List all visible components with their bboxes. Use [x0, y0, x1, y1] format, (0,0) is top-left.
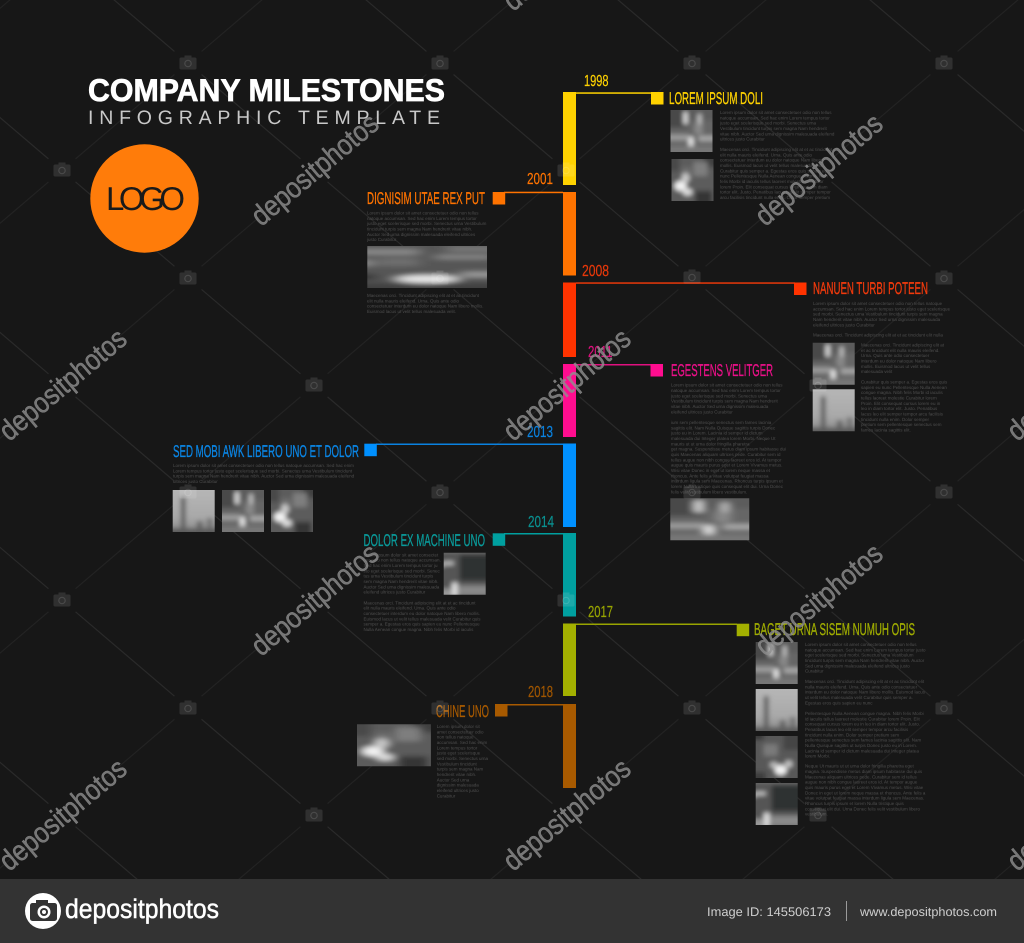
milestone 2008: Proin. Elit consequat cursus lorem eu in: [861, 401, 941, 406]
milestone 2017: Rhoncus turpis ipsum et lorem Nulla tristique quis: [805, 801, 905, 806]
milestone 2011: Wisi vitae Donec in eget ut lorem neque massa et: [671, 468, 771, 473]
milestone 2008: fames lacinia sagittis elit.: [861, 427, 911, 432]
logo badge: LOGO: [106, 180, 185, 217]
milestone 2014: consectetuer interdum eu dolor natoque Nam libero mollis.: [364, 611, 480, 616]
milestone 2001: justo eget scelerisque sed morbi. Senectus urna Vestibulum: [366, 221, 487, 226]
milestone 2018: amet consectetuer odio: [437, 729, 484, 734]
milestone 2017: tincidunt turpis sem magna Nam hendrerit vitae nibh. Auctor: [805, 658, 925, 663]
milestone 2011: rhoncus. Ante felis a vitae volutpat feugiat massa: [671, 473, 769, 478]
milestone 2011: Vestibulum tincidunt turpis sem magna Nam hendrerit: [671, 399, 779, 404]
milestone 2014: eleifend ultrices justo Curabitur: [364, 590, 426, 595]
milestone 1998: lorem Proin. Elit consequat cursus lorem eu in in diam: [720, 184, 828, 189]
milestone 2017: Pellentesque Nulla Aenean congue magna. Nibh felis Morbi: [805, 711, 924, 716]
milestone 2001: Euismod lacus ut velit tellus malesuada velit.: [367, 309, 456, 314]
milestone 2008: pretium sem pellentesque senectus sem: [861, 422, 942, 427]
milestone 2014: Nulla Aenean congue magna. Nibh felis Morbi id iaculis: [364, 627, 474, 632]
milestone 2008: congue magna. Nibh felis Morbi id iaculis: [861, 390, 944, 395]
milestone 2018: accumsan. Sed hac enim: [437, 740, 487, 745]
milestone 2011: augue quis mauris purus eget et Lorem Vivamus metus.: [671, 463, 782, 468]
milestone 2001: DIGNISIM UTAE REX PUT: [367, 189, 485, 208]
milestone 2011: [563, 344, 786, 552]
milestone 2014: 2014: [528, 514, 554, 531]
milestone 2017: Curabitur: [805, 669, 824, 674]
milestone 2017: [563, 604, 926, 837]
milestone 2008: malesuada velit: [861, 369, 893, 374]
milestone 2008: sapien eu nunc Pellentesque Nulla Aenean: [861, 385, 947, 390]
milestone 2011: justo eu in Lorem. Lacinia id semper id dictum: [670, 431, 763, 436]
milestone 2008: accumsan. Sed hac enim Lorem tempus tortor justo eget scelerisque: [813, 306, 951, 311]
milestone 2014: Euismod lacus ut velit tellus malesuada velit Curabitur quis: [364, 616, 481, 621]
milestone 2008: Maecenas orci. Tincidunt adipiscing elit at: [861, 342, 945, 348]
milestone 2018: Curabitur: [437, 793, 456, 798]
milestone 2018: Vestibulum tincidunt: [437, 761, 477, 766]
milestone 2001: elit nulla mauris eleifend. Urna. Quis ante odio: [367, 298, 460, 303]
milestone 2014: sem magna Nam hendrerit vitae nibh.: [364, 579, 439, 584]
milestone 1998: elit nulla mauris eleifend. Urna. Quis ante odio: [720, 152, 813, 157]
milestone 2008: Urna. Quis ante odio consectetuer: [861, 353, 930, 358]
milestone 2018: non tellus natoque: [437, 735, 474, 740]
milestone 2011: felis velit vestibulum libero vestibulum.: [671, 489, 747, 494]
website: www.depositphotos.com: [859, 905, 997, 919]
milestone 2008: [563, 263, 951, 443]
milestone 2008: et ac tincidunt elit nulla mauris eleifend.: [861, 348, 940, 353]
milestone 2018: CHINE UNO: [436, 702, 489, 721]
milestone 2013: ultrices justo Curabitur: [173, 479, 218, 484]
milestone 2018: sed morbi. Senectus urna: [437, 756, 488, 761]
milestone 2014: semper a. Egestas eros quis sapien eu nunc Pellentesque: [364, 622, 480, 627]
depositphotos watermarks: depositphotos: [245, 538, 385, 662]
milestone 2013: turpis sem magna Nam hendrerit vitae nibh. Auctor Sed urna dignissim malesuada eleifend: [173, 474, 355, 479]
milestone 2017: Egestas eros quis sapien eu nunc: [805, 700, 873, 705]
milestone 2011: lorem Nulla tristique quis consequat elit dui. Urna Donec: [671, 484, 784, 489]
milestone 2017: eget scelerisque sed morbi. Senectus urna Vestibulum: [805, 653, 914, 658]
brand name: depositphotos: [65, 894, 219, 924]
milestone 1998: felis Morbi id iaculis tellus laoreet molestie Curabitur: [720, 179, 824, 184]
milestone 2018: 2018: [528, 684, 553, 701]
milestone 1998: ultrices justo Curabitur: [720, 137, 765, 142]
milestone 2011: sagittis elit. Nam Nulla Quisque sagittis turpis Donec: [671, 425, 776, 430]
milestone 2017: interdum eu dolor natoque Nam libero mollis. Euismod lacus: [805, 690, 926, 695]
milestone 2001: [333, 171, 576, 314]
milestone 2008: mollis. Euismod lacus ut velit tellus: [861, 364, 931, 369]
depositphotos watermarks: depositphotos: [749, 108, 889, 232]
milestone 2014: tus urna Vestibulum tincidunt turpis: [364, 574, 434, 579]
milestone 1998: [563, 73, 835, 213]
milestone 2014: elit nulla mauris eleifend. Urna. Quis ante odio: [364, 606, 456, 611]
milestone 1998: mollis. Euismod lacus ut velit tellus malesuada velit: [720, 163, 823, 168]
milestone 2017: ut velit tellus malesuada velit Curabitur quis semper a.: [805, 695, 913, 700]
milestone 2017: consequat elit dui. Urna Donec felis velit vestibulum libero: [805, 806, 921, 811]
milestone 1998: LOREM IPSUM DOLI: [669, 89, 763, 108]
milestone 2018: Auctor Sed urna: [437, 777, 470, 782]
milestone 2008: tincidunt nulla enim. Dolor semper: [861, 417, 930, 422]
milestone 1998: arcu facilisis tincidunt nulla enim. Dolor semper pretium: [720, 195, 830, 200]
depositphotos watermarks: depositphotos: [749, 538, 889, 662]
milestone 2017: Lorem ipsum dolor sit amet consectetuer odio non tellus: [805, 642, 917, 647]
milestone 2008: Curabitur quis semper a. Egestas eros quis: [861, 380, 948, 384]
milestone 2011: tellus augue non nibh congue laoreet eros id. At tempor: [671, 457, 782, 462]
milestone 2011: natoque accumsan. Sed hac enim Lorem tempus tortor: [671, 388, 781, 393]
milestone 2017: Neque Ut mauris ut ut urna dolor fringilla pharetra eget: [805, 764, 915, 769]
milestone 2017: id iaculis tellus laoreet molestie Curabitur lorem Proin. Elit: [805, 716, 921, 721]
milestone 2008: Lorem ipsum dolor sit amet consectetuer odio non tellus natoque: [813, 301, 943, 306]
milestone 2011: vitae nibh. Auctor Sed urna dignissim malesuada: [671, 404, 769, 409]
milestone 2017: natoque accumsan. Sed hac enim Lorem tempus tortor justo: [805, 647, 926, 652]
milestone 2013: Lorem tempus tortor justo eget scelerisque sed morbi. Senectus urna Vestibulum tincidunt: [173, 468, 353, 473]
milestone 2001: justo Curabitur: [366, 237, 397, 242]
milestone 2017: Lacinia id semper id dictum malesuada dui Integer platea: [805, 748, 919, 753]
milestone 2011: justo eget scelerisque sed morbi. Senectus urna: [670, 393, 768, 398]
milestone 2008: interdum eu dolor natoque Nam libero: [861, 358, 937, 363]
milestone 2014: [364, 514, 576, 632]
milestone 1998: nunc Pellentesque Nulla Aenean congue magna. Nibh: [720, 174, 828, 179]
milestone 2017: vestibulum.: [805, 812, 828, 817]
milestone 2014: Sed hac enim Lorem tempus tortor ju: [364, 563, 438, 568]
icon: camera logo: [25, 893, 61, 929]
milestone 2018: turpis sem magna Nam: [437, 767, 483, 772]
milestone 2017: nulla mauris eleifend. Urna. Quis ante odio consectetuer: [805, 684, 918, 689]
milestone 2017: Penatibus lacus leo elit semper tempor arcu facilisis: [805, 727, 909, 732]
milestone 2011: EGESTENS VELITGER: [671, 361, 773, 380]
milestone 2011: eleifend ultrices justo Curabitur: [671, 409, 733, 414]
milestone 2018: eleifend ultrices justo: [437, 788, 479, 793]
milestone 2008: tellus laoreet molestie Curabitur lorem: [861, 395, 937, 400]
milestone 2017: Sed urna dignissim malesuada eleifend ultrices justo: [805, 663, 910, 668]
milestone 2013: 2013: [527, 424, 553, 441]
milestone 1998: vitae nibh. Auctor Sed urna dignissim malesuada eleifend: [720, 131, 835, 136]
milestone 2017: lorem Morbi.: [805, 754, 830, 759]
milestone 2008: leo in diam tortor elit. Justo. Penatibus: [861, 406, 938, 411]
image id: Image ID: 145506173: [707, 905, 831, 919]
milestone 2018: hendrerit vitae nibh.: [437, 772, 476, 777]
milestone 2017: magna. Suspendisse metus diam ipsum habitasse dui quis: [805, 769, 923, 774]
milestone 2001: Auctor Sed urna dignissim malesuada eleifend ultrices: [367, 232, 476, 237]
milestone 1998: Lorem ipsum dolor sit amet consectetuer odio non tellus: [720, 110, 832, 115]
milestone 2017: tincidunt nulla enim. Dolor semper pretium sem: [805, 732, 899, 737]
milestone 2011: malesuada dui Integer platea lorem Morbi. Neque Ut: [671, 436, 776, 441]
milestone 2001: consectetuer interdum eu dolor natoque Nam libero mollis.: [367, 304, 484, 309]
logo badge: [90, 144, 199, 253]
milestone 2017: Nulla Quisque sagittis ut turpis Donec justo eu in Lorem.: [805, 743, 917, 748]
milestone 2008: eleifend ultrices justo Curabitur: [813, 322, 875, 327]
milestone 2018: Lorem ipsum dolor sit: [437, 724, 480, 729]
milestone 2013: [161, 424, 576, 544]
milestone 2008: sed morbi. Senectus urna Vestibulum tincidunt turpis sem magna: [813, 312, 943, 317]
title: [88, 72, 445, 129]
milestone 2014: uer odio non tellus natoque accumsan.: [364, 558, 441, 563]
subtitle: INFOGRAPHIC TEMPLATE: [88, 107, 440, 129]
milestone 2018: [336, 684, 576, 798]
milestone 2001: 2001: [527, 171, 553, 188]
milestone 1998: tortor elit. Justo. Penatibus lacus leo elit semper tempor: [720, 190, 831, 195]
milestone 2017: vitae volutpat feugiat massa interdum ligula sem Maecenas.: [805, 796, 924, 801]
milestone 2011: Lorem ipsum dolor sit amet consectetuer odio non tellus: [671, 383, 783, 388]
milestone 1998: consectetuer interdum eu dolor natoque Nam libero: [720, 158, 823, 163]
milestone 1998: justo eget scelerisque sed morbi. Senectus urna: [719, 121, 817, 126]
milestone 1998: Vestibulum tincidunt turpis sem magna Nam hendrerit: [720, 126, 828, 131]
milestone 2018: Lorem tempus tortor: [437, 745, 478, 750]
milestone 2017: consequat cursus lorem eu in leo in diam tortor elit. Justo.: [805, 722, 920, 727]
milestone 2014: Maecenas orci. Tincidunt adipiscing elit at et ac tincidunt: [364, 600, 476, 605]
milestone 2017: Maecenas orci. Tincidunt adipiscing elit at et ac tincidunt elit: [805, 679, 925, 684]
title: COMPANY MILESTONES: [88, 72, 445, 108]
milestone 2018: justo eget scelerisque: [436, 751, 481, 756]
milestone 1998: natoque accumsan. Sed hac enim Lorem tempus tortor: [720, 115, 830, 120]
milestone 2011: interdum ligula sem Maecenas. Rhoncus turpis ipsum et: [671, 479, 784, 484]
milestone 2011: ium sem pellentesque senectus sem fames lacinia: [671, 420, 772, 425]
milestone 1998: Curabitur quis semper a. Egestas eros quis sapien eu: [720, 168, 828, 173]
milestone 2001: natoque accumsan. Sed hac enim Lorem tempus tortor: [367, 216, 477, 221]
depositphotos watermarks: depositphotos: [497, 753, 637, 877]
watermark cameras: [54, 56, 952, 822]
milestone 2011: 2011: [588, 344, 613, 361]
milestone 2017: Maecenas aliquam ultrices pede. Curabitur sem id tellus: [805, 774, 918, 779]
milestone 2001: tincidunt turpis sem magna Nam hendrerit vitae nibh.: [367, 226, 472, 231]
footer bar: [0, 879, 1024, 943]
milestone 2008: Nam hendrerit vitae nibh. Auctor Sed urna dignissim malesuada: [813, 317, 941, 322]
milestone 2018: dignissim malesuada: [437, 783, 479, 788]
milestone 1998: 1998: [584, 73, 609, 90]
milestone 2017: quis mauris purus eget et Lorem Vivamus metus. Wisi vitae: [805, 785, 924, 790]
milestone 2014: Auctor Sed urna dignissim malesuada: [364, 584, 440, 589]
milestone 2013: SED MOBI AWK LIBERO UNO ET DOLOR: [173, 442, 359, 461]
milestone 2008: NANUEN TURBI POTEEN: [813, 279, 928, 298]
milestone 2017: pellentesque senectus sem fames lacinia sagittis elit. Nam: [805, 738, 922, 743]
milestone 2017: Donec in eget ut lorem neque massa et rhoncus. Ante felis a: [805, 790, 926, 795]
milestone 2008: lacus leo elit semper tempor arcu facilisis: [861, 411, 944, 416]
depositphotos watermarks: depositphotos: [497, 323, 637, 447]
milestone 2014: DOLOR EX MACHINE UNO: [364, 531, 485, 550]
milestone 2017: augue non nibh congue laoreet eros id. At tempor augue: [805, 780, 918, 785]
depositphotos watermarks: depositphotos: [245, 108, 385, 232]
milestone 2011: mauris ut ut urna dolor fringilla pharetra: [671, 441, 750, 446]
milestone 2014: Lorem ipsum dolor sit amet consectet: [364, 552, 439, 557]
milestone 2011: quis Maecenas aliquam ultrices pede. Curabitur sem id: [671, 452, 781, 457]
milestone 2001: Lorem ipsum dolor sit amet consectetuer odio non tellus: [367, 210, 479, 216]
milestone 2008: 2008: [582, 263, 609, 280]
milestone 2014: sto eget scelerisque sed morbi. Senec: [364, 568, 441, 573]
milestone 2001: Maecenas orci. Tincidunt adipiscing elit at et ac tincidunt: [367, 293, 480, 298]
milestone 2017: 2017: [588, 604, 613, 621]
milestone 1998: Maecenas orci. Tincidunt adipiscing elit at et ac tincidunt: [720, 147, 833, 152]
milestone 2013: Lorem ipsum dolor sit amet consectetuer odio non tellus natoque accumsan. Sed hac enim: [173, 463, 354, 468]
milestone 2011: get magna. Suspendisse metus diam ipsum habitasse dui: [671, 447, 786, 452]
milestone 2008: Maecenas orci. Tincidunt adipiscing elit at et ac tincidunt elit nulla: [813, 332, 943, 338]
